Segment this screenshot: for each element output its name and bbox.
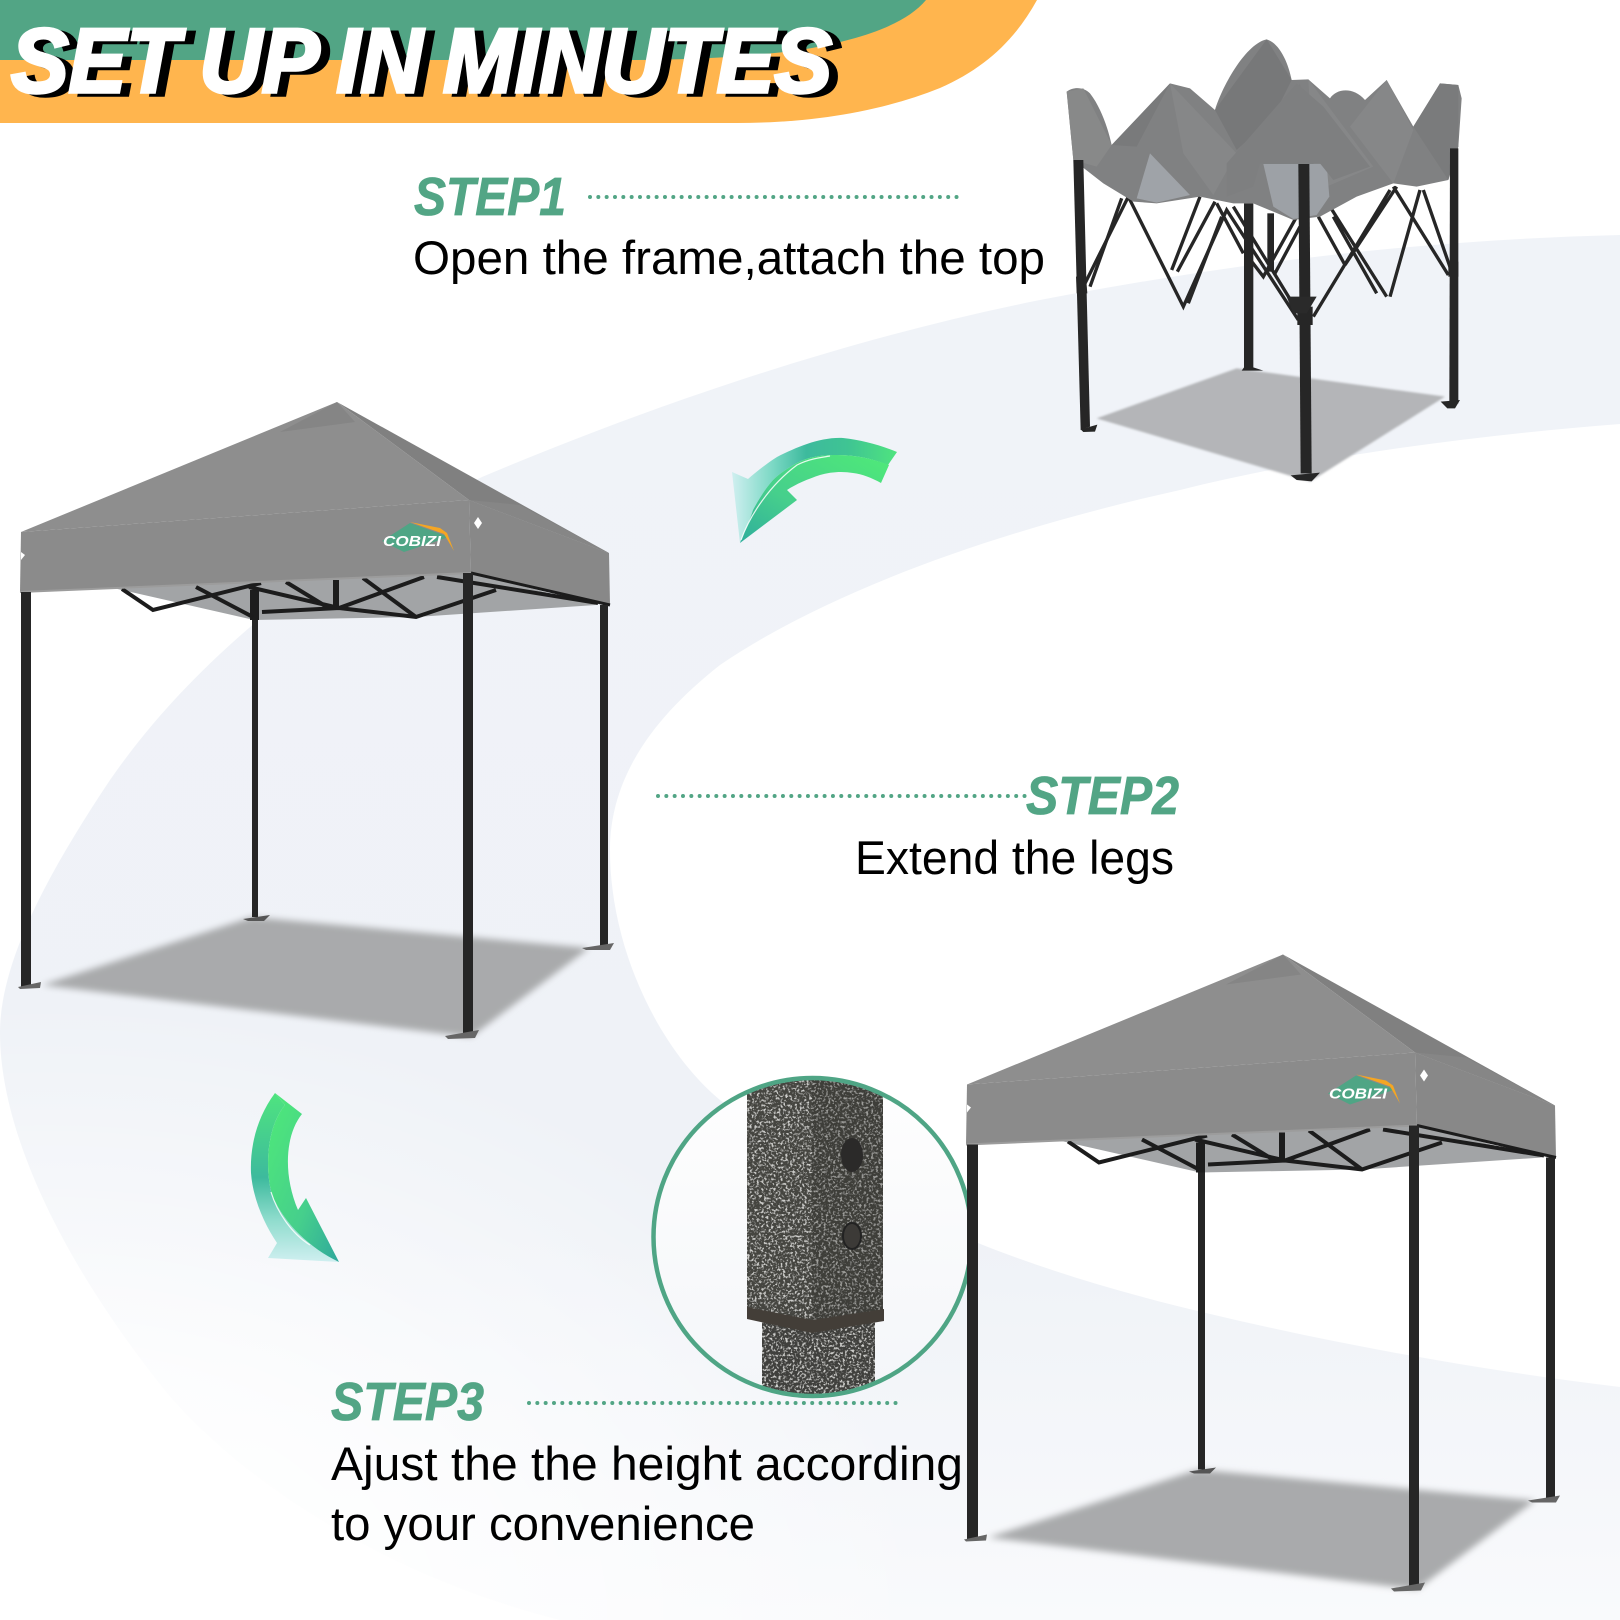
- left roof panel: [21, 402, 469, 532]
- underside of canopy: [100, 573, 596, 620]
- logo: [382, 522, 454, 552]
- tent A: fully opened canopy: [18, 402, 614, 1039]
- header banner: [0, 0, 1037, 123]
- zoom lens: adjustable leg detail: [654, 1078, 972, 1400]
- arrow highlight: [741, 456, 830, 540]
- tent B: height-adjusted canopy: [964, 954, 1560, 1592]
- legs: [18, 573, 614, 1039]
- step 3 text block: to your convenience: [331, 1497, 755, 1550]
- ground shadow: [42, 917, 589, 1037]
- step 1 dotted line: [590, 195, 960, 199]
- step 2 heading: STEP2: [1026, 766, 1179, 826]
- right roof panel: [337, 402, 609, 553]
- scissor frame: [1085, 187, 1453, 320]
- logo: [1328, 1074, 1400, 1104]
- truss frame: [122, 577, 598, 617]
- step 3 heading: STEP3: [331, 1372, 484, 1432]
- step 3 dotted line: [529, 1401, 899, 1405]
- orange band: [0, 0, 1037, 123]
- arrow lower ribbon: [740, 455, 889, 543]
- arrow outer ribbon: [251, 1093, 339, 1262]
- legs: [964, 1126, 1560, 1592]
- arrow: step 2 to step 3: [251, 1093, 339, 1262]
- foot plates: [1081, 425, 1097, 432]
- title: SET UP IN MINUTES: [11, 11, 832, 112]
- canopy facets: [1067, 39, 1458, 195]
- logo: COBIZI: [383, 533, 442, 550]
- step 3 text block: [331, 1372, 963, 1550]
- back leg: [1198, 1142, 1205, 1470]
- title: SET UP IN MINUTES: [20, 14, 841, 115]
- left valance: [20, 500, 471, 592]
- back leg: [252, 590, 258, 917]
- grommets: [1420, 1070, 1428, 1082]
- right valance: [1415, 1052, 1556, 1158]
- lower post: [762, 1322, 875, 1394]
- upper post: [747, 1078, 883, 1322]
- green band: [0, 0, 926, 60]
- truss frame: [1068, 1130, 1544, 1170]
- foot plates: [964, 1534, 987, 1542]
- ground shadow: [1097, 368, 1445, 482]
- back legs: [1242, 203, 1274, 371]
- underside patches: [1137, 153, 1190, 203]
- folded tent frame: [1067, 39, 1462, 482]
- step 2 dotted line: [658, 794, 1026, 798]
- legs: [1073, 148, 1460, 481]
- left roof panel: [967, 954, 1415, 1084]
- step 1 text block: [413, 167, 1045, 284]
- lens ring: [654, 1078, 972, 1396]
- right roof panel: [1283, 954, 1555, 1106]
- lens background: [654, 1079, 970, 1395]
- logo: COBIZI: [1329, 1086, 1388, 1102]
- grommets: [474, 517, 482, 529]
- textured post: [747, 1078, 884, 1400]
- step 2 description: Extend the legs: [855, 831, 1174, 884]
- arrow: step 1 to step 2: [732, 438, 897, 543]
- step 3 description: Ajust the the height according: [331, 1437, 963, 1490]
- lower pin: [843, 1223, 861, 1249]
- step 1 description: Open the frame,attach the top: [413, 231, 1045, 284]
- arrow inner ribbon: [268, 1093, 339, 1262]
- left valance: [966, 1052, 1417, 1144]
- upper hole: [841, 1138, 863, 1172]
- right valance: [469, 500, 610, 605]
- arrow upper ribbon: [732, 438, 897, 543]
- arrow highlight: [271, 1192, 310, 1245]
- canopy fabric: [1067, 39, 1462, 220]
- collar: [747, 1307, 884, 1333]
- foot plates: [18, 982, 41, 989]
- step 2 text block: [658, 766, 1179, 884]
- ground shadow: [988, 1470, 1535, 1590]
- underside of canopy: [1046, 1126, 1542, 1172]
- front flap: [1227, 83, 1370, 197]
- step 1 heading: STEP1: [414, 167, 566, 227]
